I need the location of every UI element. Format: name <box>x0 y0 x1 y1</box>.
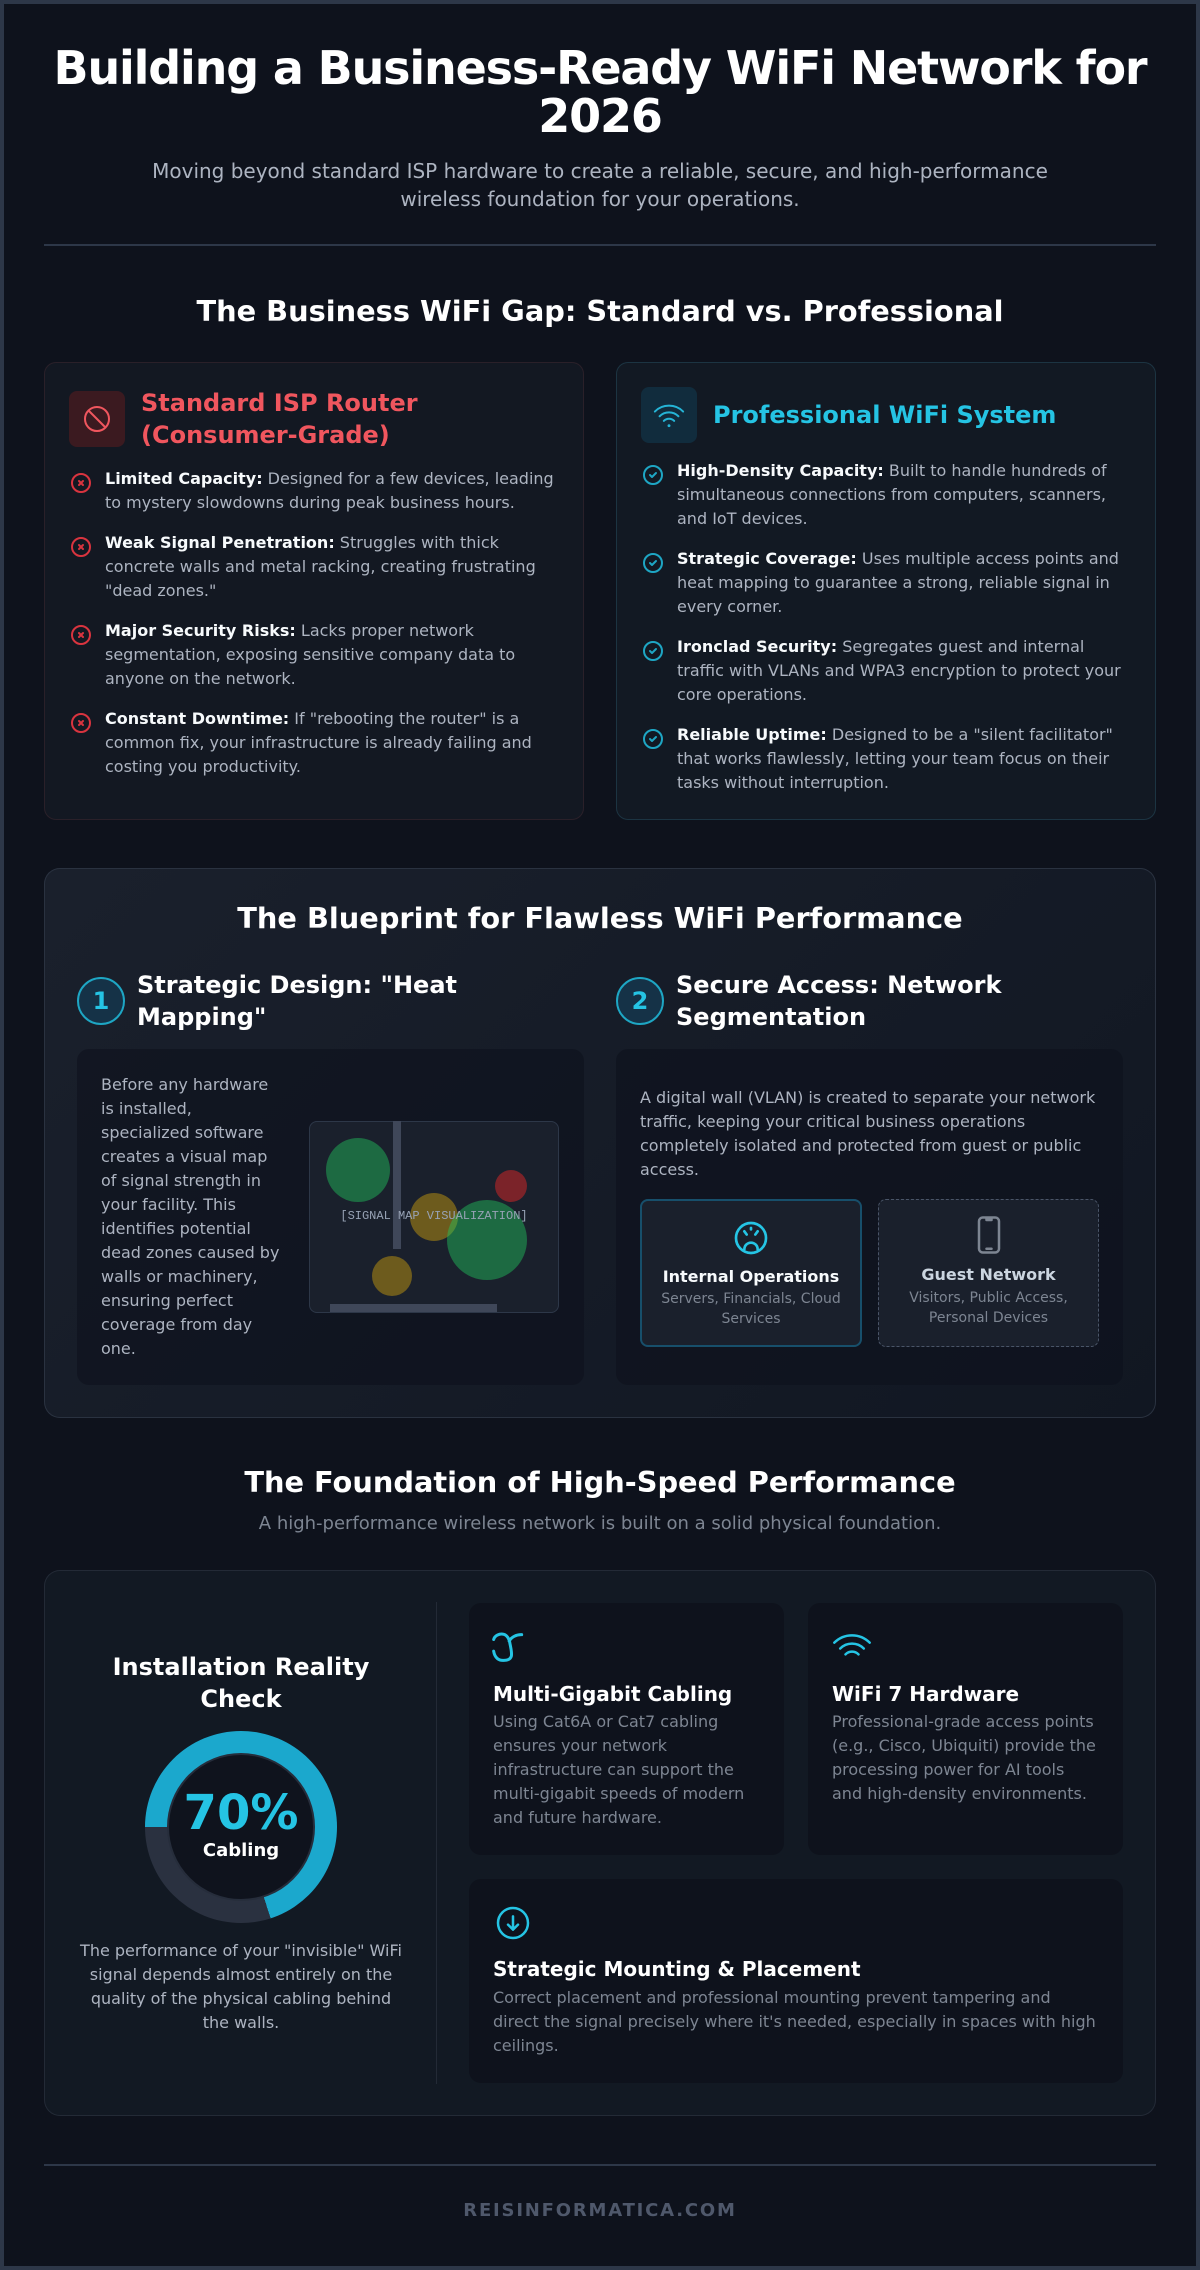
heading: installation reality check: Installation Reality <box>113 1653 369 1681</box>
title: 2026 <box>538 89 662 143</box>
list item: weak signal penetration: "dead zones." <box>105 581 216 600</box>
icon: wifi arcs <box>833 1634 871 1656</box>
step number 1 <box>77 977 125 1025</box>
text: installation reality description: The performance of your "invisible" WiFi <box>80 1941 402 1960</box>
label: cabling: Cabling <box>203 1840 279 1861</box>
title: Building a Business-Ready WiFi Network for <box>54 41 1146 95</box>
subtitle: wireless foundation for your operations. <box>400 187 800 211</box>
subtitle: Moving beyond standard ISP hardware to create a reliable, secure, and high-performance <box>152 159 1048 183</box>
heading: standard ISP router <box>141 389 418 449</box>
icon: internal operations <box>734 1222 768 1254</box>
list item: major security risks <box>71 621 515 688</box>
chart: signal heat map: [SIGNAL MAP VISUALIZATION] <box>340 1209 528 1223</box>
card: internal operations <box>640 1199 862 1347</box>
icon: phone <box>978 1216 1000 1254</box>
text: heat mapping description: Before any hardware <box>101 1075 268 1094</box>
card: guest network <box>878 1199 1099 1347</box>
heading: installation reality check <box>113 1653 369 1713</box>
list item: reliable uptime: tasks without interruption. <box>677 773 889 792</box>
text: heat mapping description: one. <box>101 1339 136 1358</box>
list item: major security risks: anyone on the network. <box>105 669 296 688</box>
list item: ironclad security: traffic with VLANs and WPA3 encryption to protect your <box>677 661 1121 680</box>
list item: major security risks: segmentation, exposing sensitive company data to <box>105 645 515 664</box>
value: 70%: 70% <box>184 1785 298 1841</box>
text: heat mapping description <box>101 1075 279 1358</box>
text: heat mapping description: dead zones caused by <box>101 1243 279 1262</box>
icon: blocked circle <box>69 391 125 447</box>
list item: strategic coverage: Strategic Coverage: Uses multiple access points and <box>677 549 1119 568</box>
heading: foundation: The Foundation of High-Speed Performance <box>244 1465 956 1499</box>
panel: foundation <box>44 1570 1156 2116</box>
text: cabling detail: infrastructure can support the <box>493 1760 734 1779</box>
panel: blueprint <box>44 868 1156 1418</box>
list item: reliable uptime: that works flawlessly, letting your team focus on their <box>677 749 1109 768</box>
list item: limited capacity <box>71 469 554 512</box>
text: mounting detail: direct the signal precisely where it's needed, especially in spaces with high <box>493 2012 1096 2031</box>
text: heat mapping description: walls or machinery, <box>101 1267 258 1286</box>
heading: standard ISP router: Standard ISP Router <box>141 389 418 417</box>
text: VLAN description: completely isolated and protected from guest or public <box>640 1136 1081 1155</box>
text: heat mapping description: is installed, <box>101 1099 192 1118</box>
text: heat mapping description: your facility. This <box>101 1195 236 1214</box>
step number 2 <box>616 977 664 1025</box>
list item: limited capacity: Limited Capacity: Designed for a few devices, leading <box>105 469 554 488</box>
chart: 70% cabling donut <box>145 1731 337 1923</box>
text: heat mapping description: specialized software <box>101 1123 263 1142</box>
text: installation reality description: the walls. <box>203 2013 279 2032</box>
text: mounting detail: Correct placement and professional mounting prevent tampering and <box>493 1988 1051 2007</box>
text: heat mapping description: ensuring perfect <box>101 1291 233 1310</box>
list item: limited capacity: to mystery slowdowns during peak business hours. <box>105 493 515 512</box>
text: internal operations detail: Servers, Financials, Cloud <box>661 1291 841 1307</box>
text: installation reality description: signal depends almost entirely on the <box>90 1965 392 1984</box>
list item: strategic coverage: every corner. <box>677 597 782 616</box>
label: multi-gigabit cabling: Multi-Gigabit Cabling <box>493 1682 732 1706</box>
list item: reliable uptime: Reliable Uptime: Designed to be a "silent facilitator" <box>677 725 1113 744</box>
title <box>54 41 1148 143</box>
text: guest network detail: Personal Devices <box>929 1310 1048 1326</box>
list item: constant downtime: costing you productivity. <box>105 757 301 776</box>
text: VLAN description: access. <box>640 1160 699 1179</box>
list item: weak signal penetration: Weak Signal Penetration: Struggles with thick <box>105 533 499 552</box>
step heading: strategic design: Strategic Design: "Heat <box>137 971 457 999</box>
icon: wifi <box>641 387 697 443</box>
list item: constant downtime: Constant Downtime: If "rebooting the router" is a <box>105 709 519 728</box>
step number 1: 1 <box>93 987 109 1015</box>
text: guest network detail <box>909 1290 1068 1326</box>
text: hardware detail: and high-density environments. <box>832 1784 1087 1803</box>
text: heat mapping description: creates a visual map <box>101 1147 267 1166</box>
step number 2: 2 <box>632 987 648 1015</box>
step heading: strategic design <box>137 971 457 1031</box>
icon: cable <box>492 1632 524 1662</box>
text: VLAN description <box>640 1088 1096 1179</box>
list item: ironclad security: Ironclad Security: Segregates guest and internal <box>677 637 1084 656</box>
text: hardware detail <box>832 1712 1096 1803</box>
text: cabling detail: multi-gigabit speeds of modern <box>493 1784 744 1803</box>
heading: the business wifi gap: The Business WiFi Gap: Standard vs. Professional <box>196 294 1004 328</box>
text: internal operations detail: Services <box>721 1311 781 1327</box>
list item: weak signal penetration <box>71 533 536 600</box>
text: cabling detail: Using Cat6A or Cat7 cabling <box>493 1712 718 1731</box>
icon: arrow down circle <box>496 1906 530 1940</box>
text: hardware detail: (e.g., Cisco, Ubiquiti) provide the <box>832 1736 1096 1755</box>
step heading: secure access: Segmentation <box>676 1003 866 1031</box>
text: mounting detail <box>493 1988 1096 2055</box>
panel: standard ISP router <box>44 362 584 820</box>
text: guest network detail: Visitors, Public Access, <box>909 1290 1068 1306</box>
panel: secure access content <box>616 1049 1123 1385</box>
card: multi-gigabit cabling <box>469 1603 784 1855</box>
chart: signal heat map <box>309 1121 559 1313</box>
text: heat mapping description: coverage from day <box>101 1315 252 1334</box>
panel: professional wifi system <box>616 362 1156 820</box>
footer: REISINFORMATICA.COM <box>463 2200 737 2221</box>
list item: high-density capacity <box>643 461 1107 528</box>
heading: blueprint: The Blueprint for Flawless WiFi Performance <box>237 901 963 935</box>
label: strategic mounting: Strategic Mounting & Placement <box>493 1957 861 1981</box>
list item: weak signal penetration: concrete walls and metal racking, creating frustrating <box>105 557 536 576</box>
label: wifi 7 hardware: WiFi 7 Hardware <box>832 1682 1019 1706</box>
list item: high-density capacity: simultaneous connections from computers, scanners, <box>677 485 1106 504</box>
list item: ironclad security: core operations. <box>677 685 807 704</box>
heading: installation reality check: Check <box>200 1685 282 1713</box>
step heading: secure access: Secure Access: Network <box>676 971 1001 999</box>
heading: professional wifi system: Professional WiFi System <box>713 401 1056 429</box>
text: hardware detail: Professional-grade access points <box>832 1712 1094 1731</box>
card: wifi 7 hardware <box>808 1603 1123 1855</box>
label: guest network: Guest Network <box>921 1265 1056 1284</box>
step heading: strategic design: Mapping" <box>137 1003 266 1031</box>
card: strategic mounting <box>469 1879 1123 2083</box>
text: cabling detail <box>493 1712 744 1827</box>
list item: major security risks: Major Security Risks: Lacks proper network <box>105 621 474 640</box>
text: installation reality description: quality of the physical cabling behind <box>91 1989 391 2008</box>
list item: high-density capacity: High-Density Capacity: Built to handle hundreds of <box>677 461 1107 480</box>
list item: constant downtime: common fix, your infrastructure is already failing and <box>105 733 532 752</box>
text: installation reality description <box>80 1941 402 2032</box>
text: heat mapping description: identifies potential <box>101 1219 251 1238</box>
text: VLAN description: traffic, keeping your critical business operations <box>640 1112 1025 1131</box>
list item: strategic coverage <box>643 549 1119 616</box>
list item: ironclad security <box>643 637 1121 704</box>
text: hardware detail: processing power for AI tools <box>832 1760 1064 1779</box>
list item: strategic coverage: heat mapping to guarantee a strong, reliable signal in <box>677 573 1110 592</box>
text: heat mapping description: of signal strength in <box>101 1171 261 1190</box>
text: VLAN description: A digital wall (VLAN) is created to separate your network <box>640 1088 1095 1107</box>
panel: strategic design content <box>77 1049 584 1385</box>
heading: standard ISP router: (Consumer-Grade) <box>141 421 390 449</box>
list item: high-density capacity: and IoT devices. <box>677 509 808 528</box>
list item: constant downtime <box>71 709 532 776</box>
label: internal operations: Internal Operations <box>663 1267 839 1286</box>
text: internal operations detail <box>661 1291 841 1327</box>
step heading: secure access <box>676 971 1002 1031</box>
text: cabling detail: and future hardware. <box>493 1808 662 1827</box>
text: cabling detail: ensures your network <box>493 1736 667 1755</box>
text: mounting detail: ceilings. <box>493 2036 559 2055</box>
subtitle <box>152 159 1048 211</box>
list item: reliable uptime <box>643 725 1113 792</box>
subheading: foundation: A high-performance wireless network is built on a solid physical foundation. <box>259 1513 941 1534</box>
